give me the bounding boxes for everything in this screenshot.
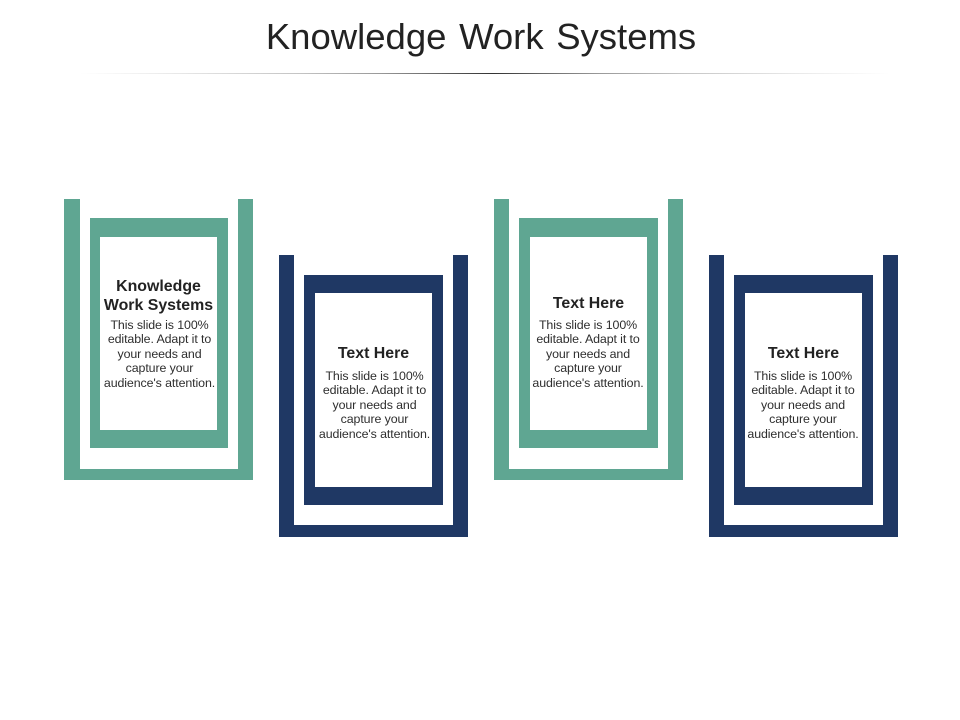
- text block: text here 3: [747, 369, 859, 441]
- text block: text here 1: your needs and: [332, 398, 417, 412]
- title underline: [80, 73, 890, 74]
- panel: text here 2: [494, 199, 683, 480]
- text block: knowledge work systems: audience's attention.: [104, 376, 215, 390]
- text block: text here 1: [319, 369, 430, 441]
- text block: text here 3: your needs and: [761, 398, 845, 412]
- text block: knowledge work systems: your needs and: [117, 347, 202, 361]
- text block: knowledge work systems: capture your: [126, 361, 193, 375]
- text block: text here 3: capture your: [769, 412, 837, 426]
- text block: text here 1: audience's attention.: [319, 427, 430, 441]
- heading: knowledge work systems: Knowledge: [116, 278, 201, 295]
- text block: knowledge work systems: editable. Adapt it to: [108, 332, 211, 346]
- heading: knowledge work systems: [104, 278, 213, 314]
- heading: text here 2: Text Here: [553, 295, 624, 312]
- text block: text here 1: capture your: [341, 412, 408, 426]
- panel: knowledge work systems: [64, 199, 253, 480]
- text block: text here 2: editable. Adapt it to: [536, 332, 640, 346]
- text block: text here 3: This slide is 100%: [754, 369, 852, 383]
- panel: text here 3: [709, 255, 898, 537]
- text block: text here 2: capture your: [554, 361, 622, 375]
- text block: text here 2: This slide is 100%: [539, 318, 637, 332]
- heading: knowledge work systems: Work Systems: [104, 297, 213, 314]
- text block: text here 2: audience's attention.: [532, 376, 644, 390]
- heading: text here 1: Text Here: [338, 345, 409, 362]
- text block: text here 1: This slide is 100%: [325, 369, 424, 383]
- text block: knowledge work systems: This slide is 100%: [110, 318, 209, 332]
- text block: text here 3: editable. Adapt it to: [751, 383, 855, 397]
- text block: text here 2: [532, 318, 644, 390]
- text block: text here 3: audience's attention.: [747, 427, 859, 441]
- text block: text here 1: editable. Adapt it to: [323, 383, 426, 397]
- text block: knowledge work systems: [104, 318, 215, 390]
- panel: text here 1: [279, 255, 468, 537]
- title: Knowledge Work Systems: [266, 16, 696, 57]
- heading: text here 3: Text Here: [768, 345, 839, 362]
- text block: text here 2: your needs and: [546, 347, 630, 361]
